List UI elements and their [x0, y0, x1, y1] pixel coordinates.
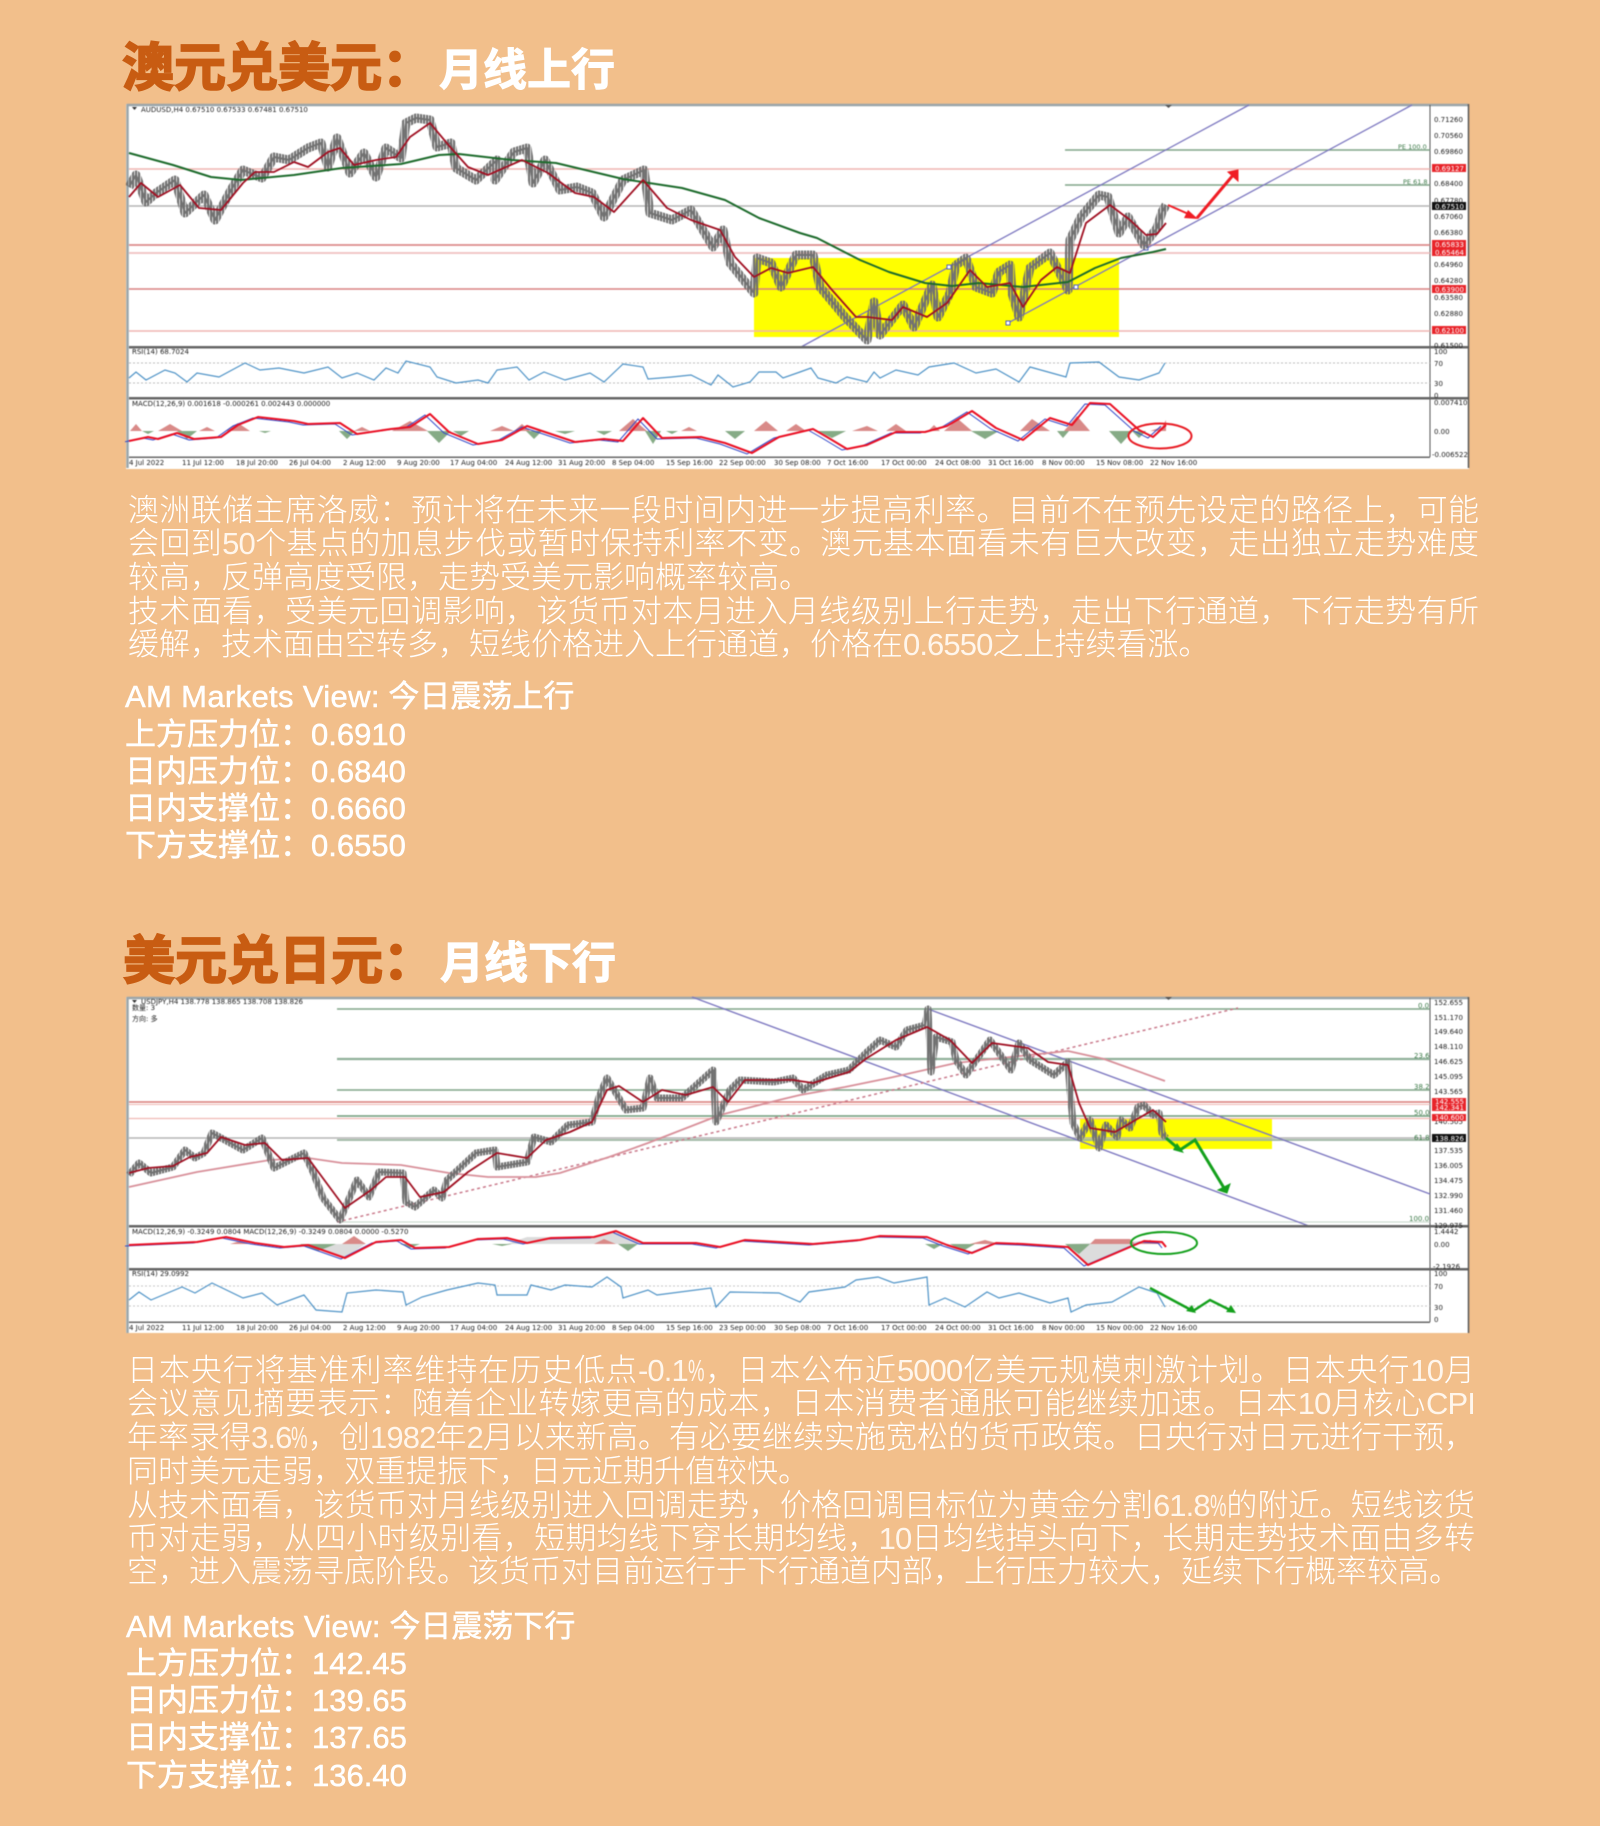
date axis: 15 Nov 08:00 [1096, 459, 1143, 467]
text block: USD/JPY analysis: % [291, 1420, 308, 1455]
date axis: 17 Aug 04:00 [450, 459, 497, 467]
text block: AUD/USD view and levels: 日内压力位：0.6840 [125, 754, 406, 789]
text block: USD/JPY view and levels: 上方压力位：142.45 [126, 1646, 407, 1681]
price axis: 152.655 [1434, 999, 1463, 1007]
price axis: -2.1926 [1433, 1263, 1461, 1271]
fibonacci labels: 50.0 [1414, 1109, 1430, 1117]
price axis: 100 [1434, 1270, 1447, 1278]
price axis: 149.640 [1434, 1028, 1463, 1036]
header labels: 方向: 多 [132, 1014, 158, 1023]
date axis: 23 Sep 00:00 [719, 1324, 766, 1332]
text block: AUD/USD view and levels [124, 679, 574, 863]
price axis: 0.69127 [1435, 165, 1464, 173]
panel separators [129, 346, 1468, 458]
date axis: 24 Oct 00:00 [935, 1324, 981, 1332]
price axis: 0.62100 [1435, 327, 1464, 335]
price axis: 142.341 [1435, 1104, 1464, 1112]
text block: AUD/USD view and levels: 日内支撑位：0.6660 [125, 791, 406, 826]
panel separators [129, 1225, 1468, 1323]
date axis: 4 Jul 2022 [129, 459, 164, 467]
date axis: 15 Sep 16:00 [666, 459, 713, 467]
date axis: 8 Nov 00:00 [1042, 1324, 1085, 1332]
price axis: 0.67780 [1434, 197, 1463, 205]
price axis: 30 [1434, 1304, 1443, 1312]
date axis: 24 Aug 12:00 [505, 1324, 552, 1332]
arrow: green forecast on price [1166, 1138, 1230, 1193]
MACD panel [125, 1228, 1166, 1266]
date axis: 17 Aug 04:00 [450, 1324, 497, 1332]
fibonacci labels: 0.0 [1418, 1002, 1429, 1010]
text block: USD/JPY analysis: 币对走弱，从四小时级别看，短期均线下穿长期均线，10日均线掉头向下，长期走势技术面由多转 [127, 1521, 1475, 1556]
chart: AUD/USD H4: PE 61.8 [1403, 178, 1428, 186]
callout: red ellipse on MACD [1128, 424, 1192, 448]
date axis: 8 Nov 00:00 [1042, 459, 1085, 467]
date axis: 22 Nov 16:00 [1150, 1324, 1197, 1332]
text block: AUD/USD analysis: 澳洲联储主席洛威：预计将在未来一段时间内进一步提高利率。目前不在预先设定的路径上，可能 [128, 493, 1479, 528]
text block: AUD/USD view and levels: 上方压力位：0.6910 [125, 717, 406, 752]
title: USD/JPY: 美元兑日元： [123, 933, 435, 991]
date axis: 30 Sep 08:00 [774, 459, 821, 467]
price axis: 137.535 [1434, 1147, 1463, 1155]
price axis: 0.67060 [1434, 213, 1463, 221]
date axis [129, 459, 1197, 467]
date axis: 22 Sep 00:00 [719, 459, 766, 467]
date axis: 8 Sep 04:00 [612, 1324, 654, 1332]
date axis: 4 Jul 2022 [129, 1324, 164, 1332]
price axis: 0.71260 [1434, 116, 1463, 124]
price axis: 0.65464 [1435, 249, 1464, 257]
price axis: 0.007410 [1434, 399, 1467, 407]
price candles [129, 1009, 1166, 1220]
text block: USD/JPY view and levels: 日内压力位：139.65 [126, 1683, 407, 1718]
RSI panel [129, 348, 1430, 387]
text block: USD/JPY analysis: 从技术面看，该货币对月线级别进入回调走势，价格回调目标位为黄金分割61.8 的附近。短线该货 [127, 1488, 1475, 1523]
date axis: 17 Oct 00:00 [881, 1324, 927, 1332]
chart: AUD/USD H4: PE 100.0 [1398, 143, 1427, 151]
title: AUD/USD: 澳元兑美元： [122, 40, 434, 98]
price axis: 100 [1434, 348, 1447, 356]
date axis: 30 Sep 08:00 [774, 1324, 821, 1332]
price axis: 140.505 [1434, 1118, 1463, 1126]
text block: AUD/USD analysis: 较高，反弹高度受限，走势受美元影响概率较高。 [128, 560, 810, 595]
fibonacci labels: 38.2 [1414, 1083, 1430, 1091]
MACD panel [124, 400, 1166, 454]
price axis: 134.475 [1434, 1177, 1463, 1185]
date axis: 11 Jul 12:00 [182, 1324, 224, 1332]
price axis: 0.64280 [1434, 277, 1463, 285]
date axis: 15 Nov 00:00 [1096, 1324, 1143, 1332]
panel: AUD/USD section [122, 40, 1479, 863]
price axis: 0.00 [1434, 1241, 1450, 1249]
date axis: 8 Sep 04:00 [612, 459, 654, 467]
arrow: red forecast [1168, 170, 1238, 219]
price axis: 0.66380 [1434, 229, 1463, 237]
price axis: 151.170 [1434, 1014, 1463, 1022]
price axis: 140.600 [1435, 1114, 1464, 1122]
price axis: 0.70560 [1434, 132, 1463, 140]
date axis: 24 Oct 08:00 [935, 459, 981, 467]
header labels: 数量: 3 [132, 1003, 155, 1012]
price axis: 0.69860 [1434, 148, 1463, 156]
text block: USD/JPY view and levels: AM Markets View: 今日震荡下行 [126, 1609, 575, 1644]
RSI panel: RSI(14) 68.7024 [132, 348, 189, 356]
header labels: AUDUSD,H4 0.67510 0.67533 0.67481 0.67510 [141, 106, 308, 114]
date axis: 22 Nov 16:00 [1150, 459, 1197, 467]
price axis: 0.63900 [1435, 286, 1464, 294]
date axis: 31 Oct 16:00 [988, 1324, 1034, 1332]
header labels [132, 997, 1172, 1023]
text block: USD/JPY analysis: 同时美元走弱，双重提振下，日元近期升值较快。 [127, 1454, 809, 1489]
text block: AUD/USD analysis [128, 493, 1479, 662]
price axis: 0.67510 [1435, 203, 1464, 211]
text block: AUD/USD analysis: 缓解，技术面由空转多，短线价格进入上行通道，价格在0.6550之上持续看涨。 [128, 627, 1209, 662]
date axis: 18 Jul 20:00 [236, 1324, 278, 1332]
price axis: 129.975 [1434, 1222, 1463, 1230]
price axis: 0.63580 [1434, 294, 1463, 302]
date axis: 26 Jul 04:00 [289, 1324, 331, 1332]
price axis: 143.565 [1434, 1088, 1463, 1096]
date axis: 9 Aug 20:00 [397, 459, 440, 467]
channel handles [947, 246, 1148, 325]
text block: AUD/USD view and levels: AM Markets View: 今日震荡上行 [125, 679, 574, 714]
header labels: USDJPY,H4 138.778 138.865 138.708 138.826 [141, 998, 304, 1006]
price axis: 70 [1434, 360, 1443, 368]
text block: AUD/USD analysis: 技术面看，受美元回调影响，该货币对本月进入月线级别上行走势，走出下行通道，下行走势有所 [128, 594, 1479, 629]
date axis: 31 Oct 16:00 [988, 459, 1034, 467]
header labels [132, 105, 1172, 114]
RSI panel: RSI(14) 29.0992 [132, 1270, 189, 1278]
date axis: 24 Aug 12:00 [505, 459, 552, 467]
price axis: 136.005 [1434, 1162, 1463, 1170]
date axis: 7 Oct 16:00 [827, 1324, 868, 1332]
date axis: 31 Aug 20:00 [558, 459, 605, 467]
callout: green ellipse on MACD [1131, 1232, 1197, 1254]
date axis: 18 Jul 20:00 [236, 459, 278, 467]
yellow zone [754, 258, 1119, 337]
moving average: green [129, 153, 1166, 287]
text block: USD/JPY view and levels: 日内支撑位：137.65 [126, 1720, 407, 1755]
MACD panel: MACD(12,26,9) -0.3249 0.0804 MACD(12,26,9) -0.3249 0.0804 0.0000 -0.5270 [132, 1228, 408, 1236]
price axis [1432, 116, 1468, 459]
price axis: 0.68400 [1434, 180, 1463, 188]
yellow zone [1080, 1119, 1272, 1149]
fibonacci labels: 61.8 [1414, 1134, 1430, 1142]
date axis: 26 Jul 04:00 [289, 459, 331, 467]
price axis: 0.65833 [1435, 241, 1464, 249]
date axis: 2 Aug 12:00 [343, 1324, 386, 1332]
text block: USD/JPY analysis: 空，进入震荡寻底阶段。该货币对目前运行于下行通道内部，上行压力较大，延续下行概率较高。 [127, 1554, 1460, 1589]
date axis: 9 Aug 20:00 [397, 1324, 440, 1332]
price axis: 138.826 [1435, 1135, 1464, 1143]
price axis: 1.4442 [1434, 1228, 1458, 1236]
price candles [129, 118, 1166, 340]
arrow: green forecast on RSI [1150, 1288, 1236, 1313]
price axis: 0 [1434, 392, 1438, 400]
text block: AUD/USD view and levels: 下方支撑位：0.6550 [125, 828, 406, 863]
price axis: 146.625 [1434, 1058, 1463, 1066]
price axis: 142.555 [1435, 1098, 1464, 1106]
chart: AUD/USD H4 [124, 103, 1470, 470]
moving average: red [129, 1027, 1166, 1208]
price axis: 0.61500 [1434, 342, 1463, 350]
RSI panel [129, 1270, 1430, 1312]
price axis: -0.006522 [1432, 451, 1468, 459]
fibonacci labels [1409, 1002, 1430, 1223]
date axis: 17 Oct 00:00 [881, 459, 927, 467]
date axis: 2 Aug 12:00 [343, 459, 386, 467]
text block: USD/JPY view and levels: 下方支撑位：136.40 [126, 1758, 407, 1793]
date axis: 31 Aug 20:00 [558, 1324, 605, 1332]
subtitle: monthly uptrend: 月线上行 [439, 46, 615, 95]
subtitle: monthly downtrend: 月线下行 [440, 939, 616, 988]
price axis: 30 [1434, 380, 1443, 388]
date axis [129, 1324, 1197, 1332]
price axis: 0.64960 [1434, 261, 1463, 269]
moving average: red [129, 123, 1166, 320]
chart: USD/JPY H4 [124, 996, 1470, 1334]
MACD panel: MACD(12,26,9) 0.001618 -0.000261 0.002443 0.000000 [132, 400, 330, 408]
price axis: 0 [1434, 1316, 1438, 1324]
text block: USD/JPY analysis: 年率录得3.6 ，创1982年2月以来新高。有必要继续实施宽松的货币政策。日央行对日元进行干预， [127, 1420, 1475, 1455]
date axis: 15 Sep 16:00 [666, 1324, 713, 1332]
fibonacci labels: 23.6 [1414, 1052, 1430, 1060]
price axis: 131.460 [1434, 1207, 1463, 1215]
price axis: 145.095 [1434, 1073, 1463, 1081]
price axis: 70 [1434, 1283, 1443, 1291]
price axis: 148.110 [1434, 1043, 1463, 1051]
text block: AUD/USD analysis: 会回到50个基点的加息步伐或暂时保持利率不变。澳元基本面看未有巨大改变，走出独立走势难度 [128, 526, 1479, 561]
fibonacci labels: 100.0 [1409, 1215, 1429, 1223]
text block: USD/JPY analysis: 日本央行将基准利率维持在历史低点-0.1 ，日本公布近5000亿美元规模刺激计划。日本央行10月 [127, 1353, 1475, 1388]
text block: USD/JPY analysis: 会议意见摘要表示：随着企业转嫁更高的成本，日本消费者通胀可能继续加速。日本10月核心CPI [127, 1386, 1475, 1421]
price axis: 0.00 [1434, 428, 1450, 436]
date axis: 7 Oct 16:00 [827, 459, 868, 467]
price axis: 0.62880 [1434, 310, 1463, 318]
text block: USD/JPY analysis: % [688, 1353, 704, 1388]
moving average: pink [129, 1051, 1165, 1187]
date axis: 11 Jul 12:00 [182, 459, 224, 467]
price axis [1432, 999, 1466, 1324]
text block: USD/JPY analysis: % [1210, 1488, 1226, 1523]
price axis: 132.990 [1434, 1192, 1463, 1200]
